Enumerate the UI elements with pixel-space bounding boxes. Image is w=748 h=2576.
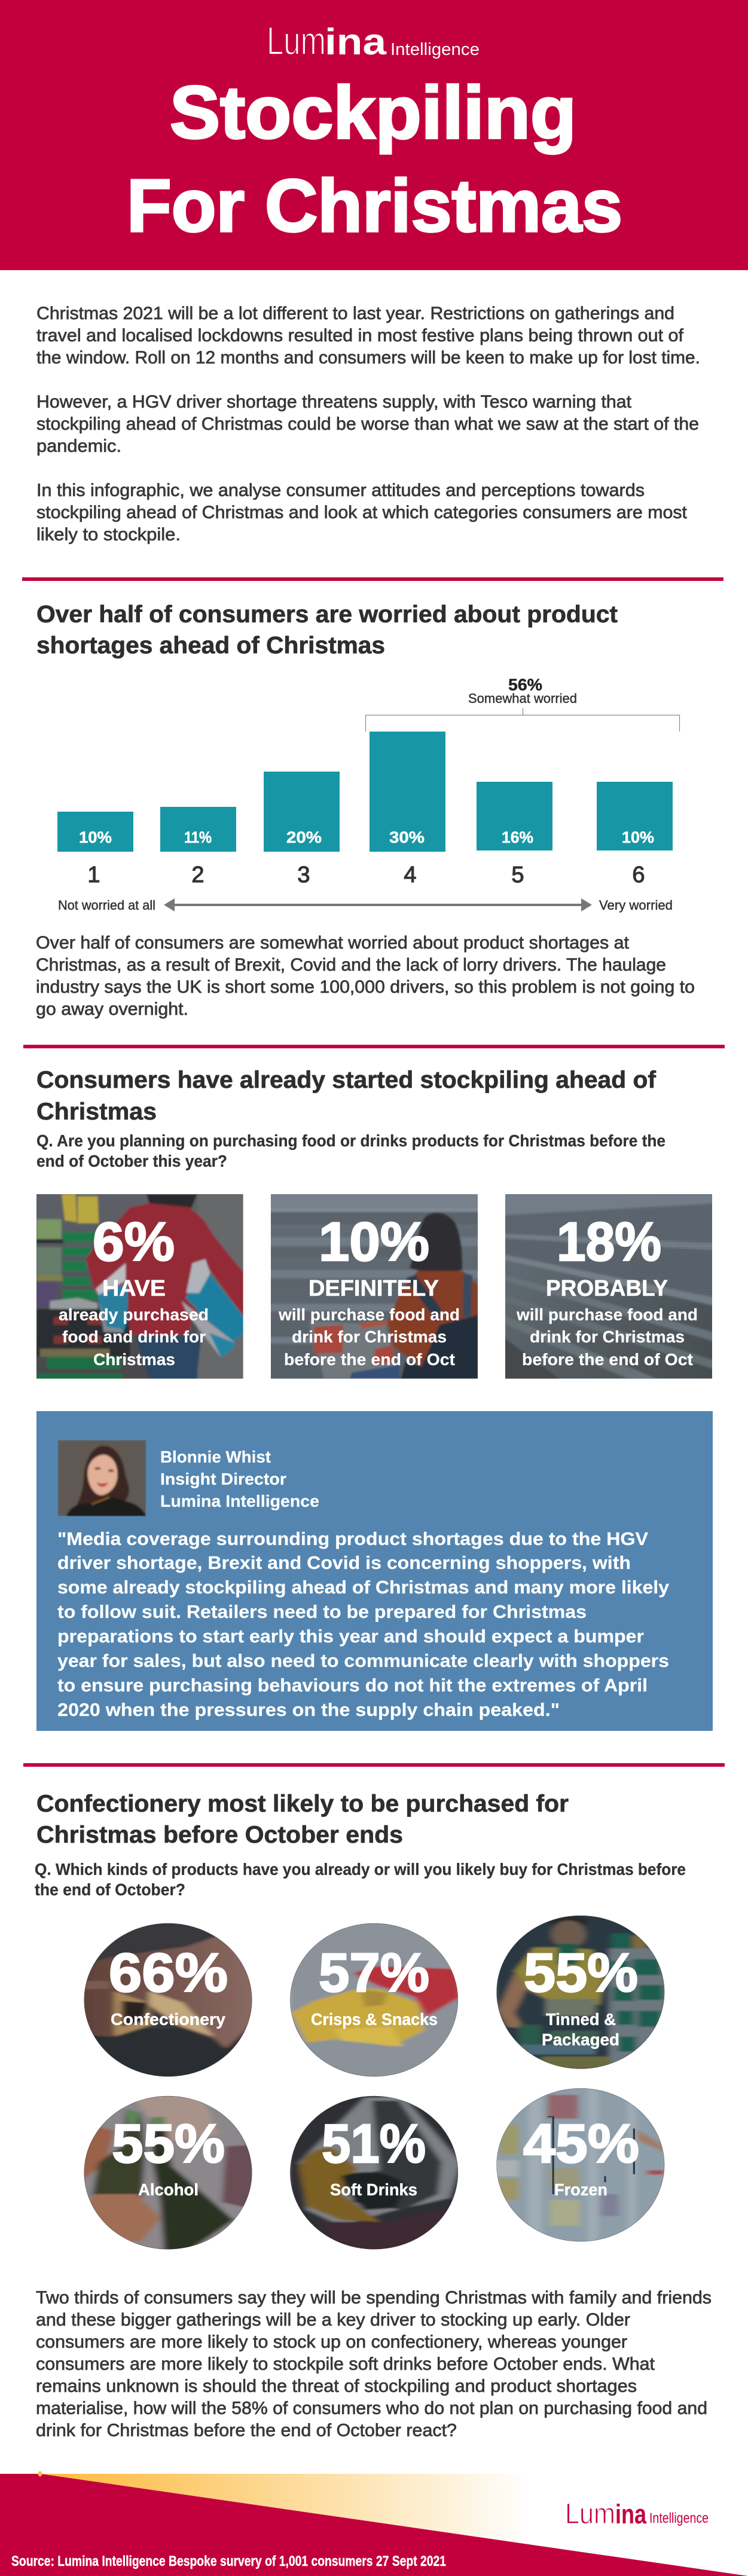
quote text (57, 1528, 670, 1720)
caption lines (516, 1305, 698, 1369)
bar 1: 10% (79, 828, 112, 846)
survey question: Q. Which kinds of products have you already or will you likely buy for Christmas before (35, 1860, 686, 1879)
circle: soft drinks 51% (288, 2093, 465, 2251)
photo: freezer aisle (493, 2087, 668, 2245)
text block: worry explanation: go away overnight. (36, 999, 188, 1019)
caption lines: before the end of Oct (284, 1350, 455, 1369)
axis numbers: 6 (632, 862, 645, 888)
quote text: to follow suit. Retailers need to be prepared for Christmas (57, 1601, 587, 1622)
heading: already stockpiling: Christmas (36, 1099, 157, 1125)
text block: conclusion: drink for Christmas before the end of October react? (36, 2421, 457, 2440)
photo: empty supermarket shelves (502, 1194, 716, 1381)
attribution (160, 1448, 319, 1510)
text block: conclusion: consumers are more likely to stockpile soft drinks before October ends. What (36, 2354, 655, 2374)
bar 2: 11% (184, 828, 212, 846)
bar 5: 16% (502, 828, 533, 846)
bar chart: level of worry (57, 675, 679, 913)
source line: Source: Lumina Intelligence Bespoke survery of 1,001 consumers 27 Sept 2021 (11, 2553, 446, 2569)
circle: soft drinks 51%: Soft Drinks (330, 2180, 417, 2199)
panel: 10% definitely: DEFINITELY (309, 1276, 439, 1301)
bar 3 (264, 772, 340, 852)
photo: drinks can top (288, 2093, 465, 2251)
intro text: the window. Roll on 12 months and consumers will be keen to make up for lost time. (36, 348, 700, 368)
intro text: However, a HGV driver shortage threatens supply, with Tesco warning that (36, 392, 632, 412)
panel: 10% definitely: 10% (319, 1211, 429, 1272)
circle: frozen 45%: Frozen (554, 2180, 607, 2199)
logo: Lumina Intelligence: ina (325, 22, 387, 63)
quote text: year for sales, but also need to communicate clearly with shoppers (57, 1650, 669, 1671)
quote text: to ensure purchasing behaviours do not hit the extremes of April (57, 1675, 648, 1696)
title: For Christmas (127, 165, 622, 247)
axis numbers: 1 (87, 862, 100, 888)
logo: Lumina Intelligence: Lum (267, 19, 326, 63)
circle: crisps and snacks 57% (288, 1920, 465, 2078)
photo: shopper in red jacket (34, 1191, 245, 1381)
panel: expert quote (36, 1411, 713, 1731)
survey question (35, 1860, 686, 1899)
bar 6 (597, 782, 673, 850)
bar 1 (57, 812, 133, 852)
intro text: Christmas 2021 will be a lot different to last year. Restrictions on gatherings and (36, 304, 674, 323)
callout: 56% somewhat worried: Somewhat worried (468, 691, 577, 706)
circle: confectionery 66%: 66% (109, 1942, 228, 2003)
bar 4: 30% (389, 828, 425, 846)
logo: Lumina Intelligence: Intelligence (390, 40, 480, 59)
label lines: Tinned & (546, 2010, 616, 2029)
scale label: very worried: Very worried (599, 898, 673, 913)
text block: conclusion: materialise, how will the 58% of consumers who do not plan on purchasing food and (36, 2398, 707, 2418)
intro text: stockpiling ahead of Christmas and look at which categories consumers are most (36, 503, 688, 522)
circle: tinned and packaged 55% (493, 1914, 668, 2072)
caption lines (59, 1305, 209, 1369)
heading: worried about shortages: Over half of consumers are worried about product (36, 601, 618, 628)
text block: conclusion: and these bigger gatherings will be a key driver to stocking up early. Older (36, 2310, 630, 2330)
quote text: 2020 when the pressures on the supply chain peaked." (57, 1699, 560, 1720)
intro text: In this infographic, we analyse consumer attitudes and perceptions towards (36, 481, 645, 500)
photo: chocolate bar (80, 1920, 257, 2078)
quote text: driver shortage, Brexit and Covid is concerning shoppers, with (57, 1552, 631, 1573)
intro text: stockpiling ahead of Christmas could be worse than what we saw at the start of the (36, 414, 699, 434)
intro text (36, 304, 700, 544)
footer band (0, 2471, 748, 2576)
panel: 10% definitely (268, 1191, 481, 1381)
photo: man with tins (493, 1914, 668, 2072)
caption lines: already purchased (59, 1305, 209, 1324)
panel: 6% have purchased: 6% (93, 1211, 175, 1272)
logo: Lumina Intelligence: ina (615, 2499, 647, 2529)
logo: Lumina Intelligence: Lum (565, 2498, 615, 2530)
bar 3: 20% (286, 828, 322, 846)
caption lines: food and drink for (62, 1327, 206, 1346)
circle: tinned and packaged 55%: 55% (524, 1942, 638, 2003)
axis numbers: 2 (191, 862, 204, 888)
intro text: travel and localised lockdowns resulted in most festive plans being thrown out of (36, 326, 684, 345)
caption lines: drink for Christmas (292, 1327, 447, 1346)
axis numbers: 5 (511, 862, 524, 888)
circle: alcohol 55% (80, 2093, 257, 2251)
logo: Lumina Intelligence (565, 2498, 709, 2530)
heading: confectionery most likely: Christmas before October ends (36, 1822, 403, 1848)
caption lines (278, 1305, 460, 1369)
text block: worry explanation: Christmas, as a result of Brexit, Covid and the lack of lorry drivers. The haulage (36, 955, 666, 975)
photo: woman with trolley at empty shelves (268, 1191, 481, 1381)
text block: conclusion: consumers are more likely to stock up on confectionery, whereas younger (36, 2332, 627, 2352)
circle: alcohol 55%: Alcohol (138, 2180, 199, 2199)
panel: 18% probably: 18% (557, 1211, 661, 1272)
text block: conclusion: Two thirds of consumers say they will be spending Christmas with family and friends (36, 2288, 712, 2308)
heading: confectionery most likely (36, 1791, 569, 1848)
caption lines: before the end of Oct (522, 1350, 693, 1369)
panel: 6% have purchased (34, 1191, 245, 1381)
heading: confectionery most likely: Confectionery most likely to be purchased for (36, 1791, 569, 1817)
panel: 18% probably (502, 1194, 716, 1381)
axis numbers: 4 (404, 862, 417, 888)
axis numbers (87, 862, 645, 888)
intro text: likely to stockpile. (36, 525, 181, 544)
bar 2 (160, 807, 236, 852)
text block: conclusion: remains unknown is should the threat of stockpiling and product shortages (36, 2376, 637, 2396)
text block: worry explanation: Over half of consumers are somewhat worried about product shortages at (36, 933, 630, 953)
circle: soft drinks 51%: 51% (322, 2113, 426, 2174)
heading: already stockpiling: Consumers have already started stockpiling ahead of (36, 1067, 657, 1093)
attribution: Insight Director (160, 1470, 286, 1488)
caption lines: Christmas (93, 1350, 175, 1369)
bar 6: 10% (622, 828, 654, 846)
attribution: Lumina Intelligence (160, 1492, 319, 1510)
callout: 56% somewhat worried: 56% (508, 675, 542, 694)
logo: Lumina Intelligence (267, 19, 480, 63)
photo: Blonnie Whist portrait (58, 1440, 146, 1516)
text block: worry explanation: industry says the UK is short some 100,000 drivers, so this problem is not going to (36, 977, 695, 997)
attribution: Blonnie Whist (160, 1448, 271, 1466)
circle: crisps and snacks 57%: 57% (319, 1942, 429, 2003)
circle: frozen 45%: 45% (523, 2113, 639, 2174)
heading: worried about shortages: shortages ahead of Christmas (36, 632, 385, 659)
callout: 56% somewhat worried (366, 675, 679, 732)
survey question: Q. Are you planning on purchasing food or drinks products for Christmas before the (36, 1131, 665, 1150)
title: Stockpiling (170, 72, 576, 154)
heading: worried about shortages (36, 601, 618, 659)
survey question: the end of October? (35, 1880, 185, 1899)
title (127, 72, 622, 247)
label lines (542, 2010, 619, 2049)
circle: confectionery 66%: Confectionery (111, 2010, 225, 2029)
bar 4 (370, 732, 445, 852)
label lines: Packaged (542, 2030, 619, 2049)
circle: confectionery 66% (80, 1920, 257, 2078)
heading: already stockpiling (36, 1067, 657, 1125)
caption lines: will purchase food and (516, 1305, 698, 1324)
bar 5 (477, 782, 552, 850)
intro text: pandemic. (36, 436, 121, 456)
circle: crisps and snacks 57%: Crisps & Snacks (311, 2010, 438, 2029)
caption lines: will purchase food and (278, 1305, 460, 1324)
circle: alcohol 55%: 55% (112, 2113, 225, 2174)
text block: conclusion (36, 2288, 712, 2440)
header banner (0, 0, 748, 270)
text block: worry explanation (36, 933, 695, 1019)
logo: Lumina Intelligence: Intelligence (649, 2510, 709, 2526)
caption lines: drink for Christmas (530, 1327, 685, 1346)
quote text: some already stockpiling ahead of Christmas and many more likely (57, 1577, 670, 1598)
axis numbers: 3 (297, 862, 310, 888)
quote text: preparations to start early this year and should expect a bumper (57, 1626, 644, 1647)
panel: 6% have purchased: HAVE (102, 1276, 166, 1301)
photo: crisps packet (288, 1920, 465, 2078)
photo: clinking bottles (80, 2093, 257, 2251)
survey question: end of October this year? (36, 1152, 227, 1170)
arrow: worry scale (164, 898, 592, 911)
quote text: "Media coverage surrounding product shortages due to the HGV (57, 1528, 648, 1549)
panel: 18% probably: PROBABLY (546, 1276, 668, 1301)
scale label: not worried: Not worried at all (58, 898, 155, 913)
survey question (36, 1131, 665, 1170)
circle: frozen 45% (493, 2087, 668, 2245)
